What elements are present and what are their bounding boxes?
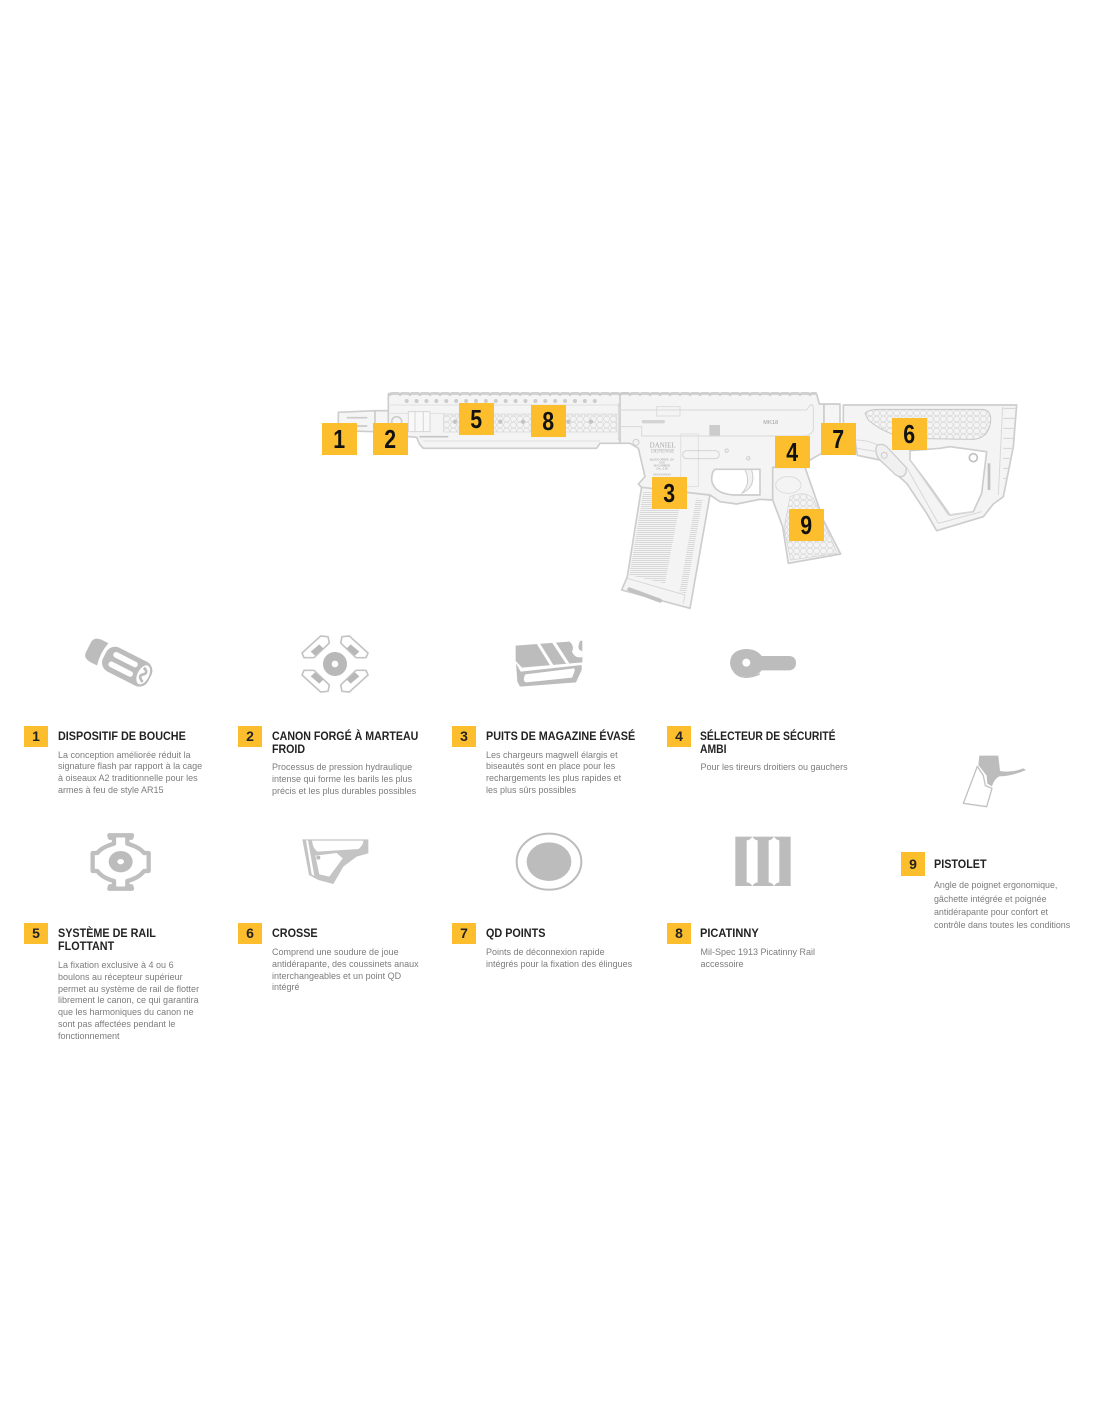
receiver: M4 CARBINE xyxy=(654,464,670,468)
description: signature flash par rapport à la cage xyxy=(58,761,202,771)
heading: FROID xyxy=(272,742,305,756)
description: Processus de pression hydraulique xyxy=(272,762,412,772)
panel: feature 6 xyxy=(238,839,419,992)
description: accessoire xyxy=(700,959,744,969)
receiver markings: DANIEL xyxy=(650,441,676,449)
description xyxy=(58,750,202,795)
description: antidérapante, des coussinets anaux xyxy=(272,959,419,969)
heading xyxy=(58,926,156,953)
number badge xyxy=(24,726,48,747)
panel: feature 2 xyxy=(238,635,418,796)
magazine xyxy=(622,487,710,608)
marker 6 xyxy=(892,418,927,450)
panel: feature 7 xyxy=(452,832,632,969)
receiver: CAL. 5.56 xyxy=(656,467,668,471)
marker 5: 5 xyxy=(471,404,482,434)
number badge: 1 xyxy=(32,728,40,744)
description: boulons au récepteur supérieur xyxy=(58,972,183,982)
description: intense qui forme les barils les plus xyxy=(272,774,412,784)
marker 8: 8 xyxy=(543,406,554,436)
heading: DISPOSITIF DE BOUCHE xyxy=(58,729,186,743)
heading: QD POINTS xyxy=(486,926,545,940)
number badge xyxy=(667,923,691,944)
icon: ambi safety selector xyxy=(730,649,796,678)
description: Mil-Spec 1913 Picatinny Rail xyxy=(700,947,815,957)
description xyxy=(700,947,815,969)
heading: SYSTÈME DE RAIL xyxy=(58,926,156,940)
description: intégré xyxy=(272,982,300,992)
barrel collar xyxy=(375,411,389,433)
panel: feature 4 xyxy=(667,649,848,772)
icon: free-floating rail xyxy=(90,833,151,891)
front sight details xyxy=(392,417,402,427)
marker 7: 7 xyxy=(833,424,844,454)
receiver: DEFENSE xyxy=(651,449,674,455)
marker 4 xyxy=(775,436,810,468)
marker 3 xyxy=(652,477,687,509)
panel: feature 8 xyxy=(667,836,815,969)
rail teeth xyxy=(389,392,629,396)
description: contrôle dans toutes les conditions xyxy=(934,920,1070,930)
number badge xyxy=(901,852,925,876)
trigger guard xyxy=(712,469,760,495)
heading xyxy=(272,729,418,756)
heading: CANON FORGÉ À MARTEAU xyxy=(272,729,418,743)
icon: picatinny rail xyxy=(735,836,791,886)
handguard body xyxy=(388,394,630,448)
heading: FLOTTANT xyxy=(58,939,114,953)
marker 9 xyxy=(789,509,824,541)
panel: feature 5 xyxy=(24,833,199,1041)
keymod hex panel xyxy=(443,414,617,432)
receiver xyxy=(620,392,824,504)
receiver: XXXXXXXXXX xyxy=(653,472,671,476)
icon: cold hammer forged barrel xyxy=(301,635,369,693)
icon: buttstock xyxy=(302,839,368,884)
pistol grip xyxy=(773,467,841,563)
heading: PISTOLET xyxy=(934,857,987,871)
marker 9: 9 xyxy=(801,510,812,540)
description xyxy=(486,750,622,795)
buttstock xyxy=(843,405,1017,531)
description: La conception améliorée réduit la xyxy=(58,750,191,760)
panel: feature 3 xyxy=(452,640,635,795)
description: intégrés pour la fixation des élingues xyxy=(486,959,632,969)
heading: PICATINNY xyxy=(700,926,759,940)
icon: flared magwell xyxy=(516,640,582,687)
number badge xyxy=(24,923,48,944)
description: Les chargeurs magwell élargis et xyxy=(486,750,618,760)
marker 5 xyxy=(459,403,494,435)
description: Angle de poignet ergonomique, xyxy=(934,880,1057,890)
description: rechargements les plus rapides et xyxy=(486,773,621,783)
description xyxy=(934,880,1070,930)
receiver: MK18 xyxy=(763,420,778,426)
number badge: 5 xyxy=(32,925,40,941)
description: permet au système de rail de flotter xyxy=(58,984,199,994)
description: interchangeables et un point QD xyxy=(272,971,401,981)
marker 7 xyxy=(821,423,856,455)
description xyxy=(272,762,416,796)
marker 4: 4 xyxy=(787,437,798,467)
rear section: receiver, magazine, grip and stock xyxy=(620,392,1017,608)
heading: PUITS DE MAGAZINE ÉVASÉ xyxy=(486,729,635,743)
number badge: 6 xyxy=(246,925,254,941)
receiver: USA xyxy=(659,461,665,465)
icon: QD point xyxy=(516,832,582,891)
heading: AMBI xyxy=(700,742,727,756)
description: sont pas affectées pendant le xyxy=(58,1019,175,1029)
number badge xyxy=(452,726,476,747)
description: antidérapante pour confort et xyxy=(934,907,1048,917)
number badge: 4 xyxy=(675,728,683,744)
number badge: 9 xyxy=(909,856,917,872)
number badge: 2 xyxy=(246,728,254,744)
description: Points de déconnexion rapide xyxy=(486,947,605,957)
marker 1 xyxy=(322,423,357,455)
description: biseautés sont en place pour les xyxy=(486,761,615,771)
description: librement le canon, ce qui garantira xyxy=(58,995,199,1005)
description: précis et les plus durables possibles xyxy=(272,786,416,796)
description: Comprend une soudure de joue xyxy=(272,947,399,957)
description xyxy=(272,947,419,992)
description: La fixation exclusive à 4 ou 6 xyxy=(58,960,174,970)
number badge xyxy=(667,726,691,747)
number badge: 8 xyxy=(675,925,683,941)
rifle line drawing xyxy=(338,392,1018,610)
rail holes xyxy=(407,395,597,407)
icon: pistol grip xyxy=(962,756,1026,808)
front section: muzzle, barrel and handguard xyxy=(338,392,630,448)
heading: CROSSE xyxy=(272,926,318,940)
number badge: 3 xyxy=(460,728,468,744)
number badge xyxy=(238,726,262,747)
panel: feature 1 xyxy=(24,638,202,795)
panel: feature 9 xyxy=(901,756,1070,930)
description: fonctionnement xyxy=(58,1031,120,1041)
receiver extension xyxy=(824,404,840,427)
marker 3: 3 xyxy=(664,478,675,508)
muzzle device xyxy=(338,411,375,432)
rifle diagram xyxy=(322,392,1018,610)
description: Pour les tireurs droitiers ou gauchers xyxy=(700,762,848,772)
description: armes à feu de style AR15 xyxy=(58,785,164,795)
marker 2 xyxy=(373,423,408,455)
number badge xyxy=(238,923,262,944)
description: gâchette intégrée et poignée xyxy=(934,894,1047,904)
marker 1: 1 xyxy=(334,424,345,454)
heading xyxy=(700,729,836,756)
number badge: 7 xyxy=(460,925,468,941)
description: les plus sûrs possibles xyxy=(486,785,576,795)
icon: muzzle device xyxy=(85,638,152,687)
marker 6: 6 xyxy=(904,419,915,449)
description: que les harmoniques du canon ne xyxy=(58,1007,194,1017)
receiver: BLACK CREEK, GA xyxy=(650,458,674,462)
heading: SÉLECTEUR DE SÉCURITÉ xyxy=(700,729,836,743)
description xyxy=(58,960,199,1041)
number badge xyxy=(452,923,476,944)
marker 2: 2 xyxy=(385,424,396,454)
marker 8 xyxy=(531,405,566,437)
description: à oiseaux A2 traditionnelle pour les xyxy=(58,773,198,783)
description xyxy=(486,947,632,969)
